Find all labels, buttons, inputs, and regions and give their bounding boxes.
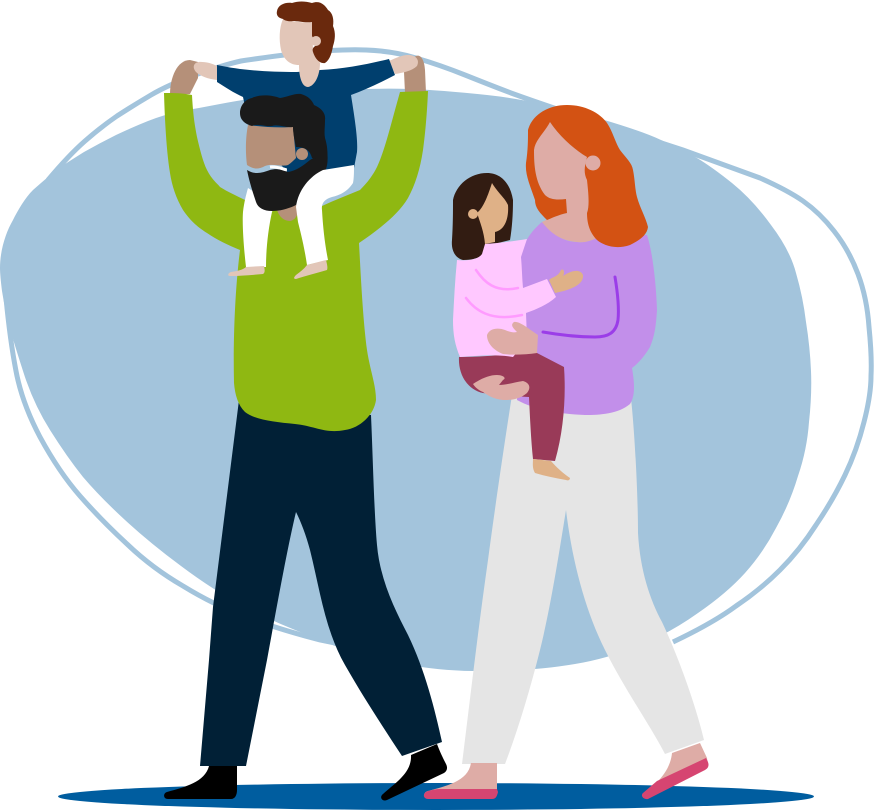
ground shadow <box>58 783 814 810</box>
boy navy top <box>217 59 395 175</box>
woman lower hand <box>473 375 529 400</box>
woman left foot <box>424 763 497 798</box>
man hand right <box>404 56 426 93</box>
boy neck and face <box>280 19 320 87</box>
girl hair <box>452 173 513 260</box>
man face <box>246 125 296 169</box>
man trousers <box>200 400 442 766</box>
girl ear <box>468 209 478 219</box>
woman upper hand <box>487 322 538 355</box>
man left boot <box>164 766 237 799</box>
man <box>164 56 447 800</box>
woman trousers <box>462 390 704 764</box>
boy left trouser leg <box>243 188 275 267</box>
man neck <box>276 200 300 221</box>
man green jumper <box>164 91 428 431</box>
boy hand left <box>194 62 217 80</box>
man hand left <box>170 60 198 94</box>
man ear <box>296 148 308 160</box>
girl sweater creases <box>466 270 522 317</box>
face gap shade <box>249 166 270 170</box>
woman hair back <box>526 105 648 247</box>
girl <box>452 173 583 480</box>
girl face <box>477 183 508 244</box>
woman sweater <box>517 222 657 415</box>
woman ear <box>586 156 600 170</box>
boy right trouser leg <box>296 165 354 265</box>
man beard <box>247 150 328 211</box>
girl sweater <box>453 239 556 357</box>
boy right foot <box>294 260 327 279</box>
boy hand right <box>389 55 418 74</box>
girl hand <box>549 270 583 293</box>
boy ear <box>311 36 321 46</box>
woman right shoe <box>642 758 708 799</box>
face gap highlight <box>270 167 287 170</box>
man right boot <box>381 744 447 800</box>
boy on shoulders <box>194 2 418 279</box>
girl foot <box>533 459 570 480</box>
woman <box>424 105 708 799</box>
girl pants <box>459 353 565 461</box>
woman left shoe <box>424 789 498 799</box>
boy left foot <box>228 266 265 276</box>
boy hair <box>277 2 335 63</box>
man hair <box>240 94 327 160</box>
woman neck and face <box>534 122 597 242</box>
background outline <box>6 50 871 645</box>
background blob <box>0 89 811 671</box>
woman right foot <box>643 743 708 796</box>
face gap navy <box>287 158 307 170</box>
woman sweater crease <box>543 277 618 337</box>
